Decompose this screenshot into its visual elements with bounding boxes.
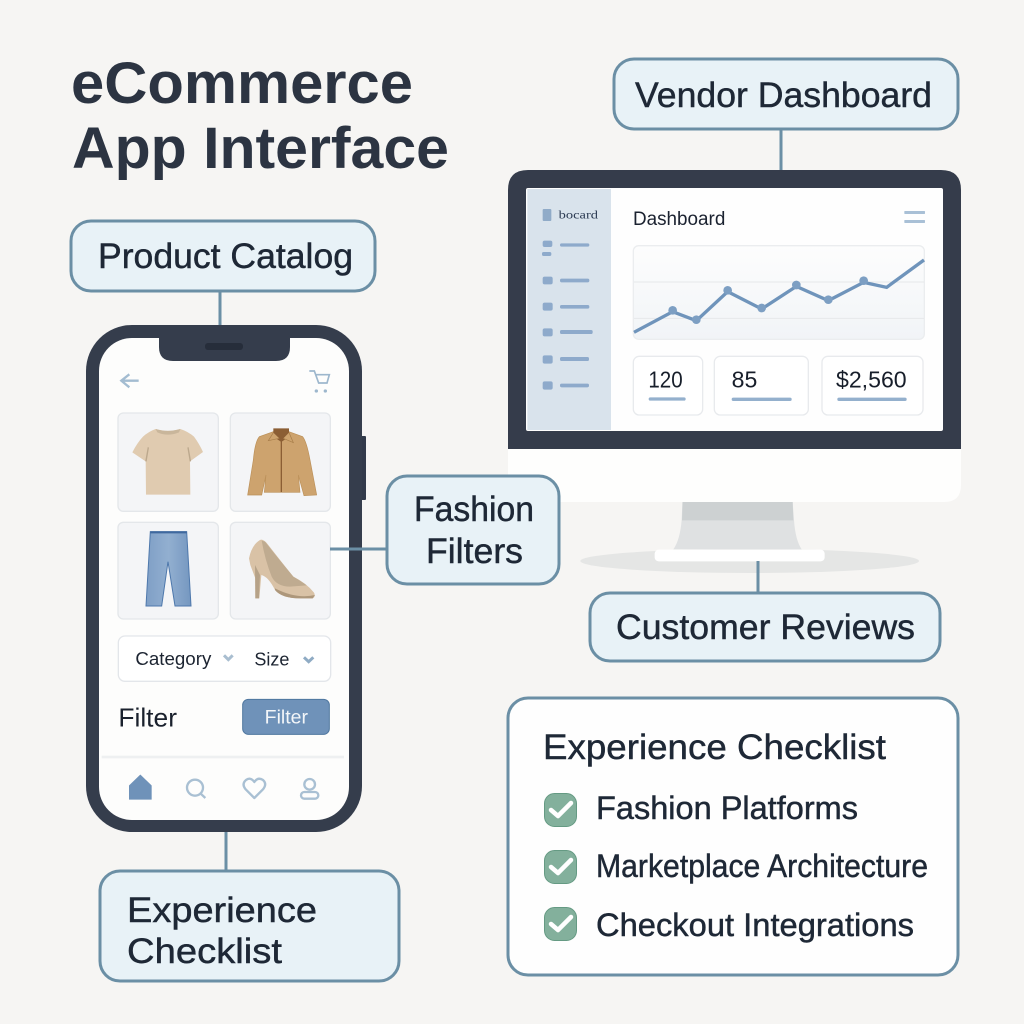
icon: home <box>129 775 151 799</box>
icon: back arrow <box>121 374 139 387</box>
icon: user <box>301 779 318 799</box>
icon: menu <box>904 211 925 223</box>
dashboard heading: Dashboard <box>633 209 725 230</box>
connector: customer reviews to stand <box>756 561 760 594</box>
panel: experience checklist <box>508 698 958 975</box>
label: fashion filters <box>387 476 559 584</box>
phone mockup <box>86 325 366 832</box>
phone screen <box>99 338 349 820</box>
connector: product catalog to phone <box>218 290 222 327</box>
connector: vendor dashboard to monitor <box>780 128 782 172</box>
sidebar menu items <box>542 241 593 390</box>
sidebar logo <box>543 209 551 221</box>
filter dropdowns <box>118 636 331 681</box>
phone side button <box>360 436 366 500</box>
icon: cart <box>309 371 329 393</box>
sidebar <box>527 189 611 430</box>
filter button: Filter <box>265 708 309 729</box>
label: fashion filters: Fashion <box>414 490 534 529</box>
title: App Interface <box>72 116 449 181</box>
bottom nav divider <box>102 756 344 758</box>
filter dropdowns: Size <box>254 648 289 669</box>
product card: high heel shoe <box>230 522 330 619</box>
label: experience checklist: Experience <box>127 891 317 930</box>
phone body <box>86 325 362 832</box>
label: experience checklist: Checklist <box>127 932 282 971</box>
product card: jeans <box>118 522 218 619</box>
stat card: 85 <box>714 356 808 415</box>
label: vendor dashboard <box>614 59 958 129</box>
title <box>71 51 449 181</box>
stat card: 120 <box>633 356 703 415</box>
filter label: Filter <box>118 703 177 733</box>
product card: t-shirt <box>118 413 218 511</box>
filter dropdowns: Category <box>135 648 212 669</box>
title: eCommerce <box>71 51 413 116</box>
monitor chin <box>508 440 961 502</box>
checklist item: fashion platforms: Fashion Platforms <box>596 790 858 826</box>
phone speaker <box>205 343 243 350</box>
label: customer reviews <box>590 593 940 661</box>
phone notch <box>159 337 290 361</box>
label: product catalog <box>71 221 375 291</box>
checklist item: checkout integrations: Checkout Integrations <box>596 907 914 943</box>
connector: fashion filters to phone <box>330 548 388 550</box>
label: fashion filters: Filters <box>426 532 523 571</box>
filter button <box>243 699 329 734</box>
monitor <box>508 170 961 502</box>
stat card: 85: 85 <box>732 366 757 392</box>
line chart <box>633 246 924 339</box>
checklist item: marketplace architecture: Marketplace Architecture <box>596 848 928 884</box>
label: product catalog: Product Catalog <box>98 237 353 276</box>
icon: search <box>187 780 205 798</box>
label: customer reviews: Customer Reviews <box>616 608 915 647</box>
stat card: revenue: $2,560 <box>836 366 907 392</box>
stand base shadow <box>580 549 919 573</box>
stat card: 120: 120 <box>648 366 683 392</box>
phone lower content drawn in zoomed coordinates <box>102 636 344 799</box>
stand neck shadow <box>682 502 793 520</box>
checklist heading: Experience Checklist <box>543 728 886 767</box>
product card: jacket <box>230 413 330 511</box>
stand foot <box>655 550 825 561</box>
label: vendor dashboard: Vendor Dashboard <box>635 76 932 115</box>
stat card: revenue <box>822 356 923 415</box>
label: experience checklist <box>100 871 399 981</box>
monitor bezel <box>508 170 961 449</box>
sidebar: bocard <box>559 208 598 222</box>
dashboard content drawn in zoomed coordinates <box>527 189 925 430</box>
monitor stand <box>580 502 919 573</box>
monitor screen <box>526 188 943 431</box>
icon: heart <box>244 779 265 798</box>
phone content drawn in zoomed coordinates <box>118 371 330 619</box>
connector: experience checklist to phone <box>224 830 228 872</box>
stand neck <box>673 502 802 549</box>
